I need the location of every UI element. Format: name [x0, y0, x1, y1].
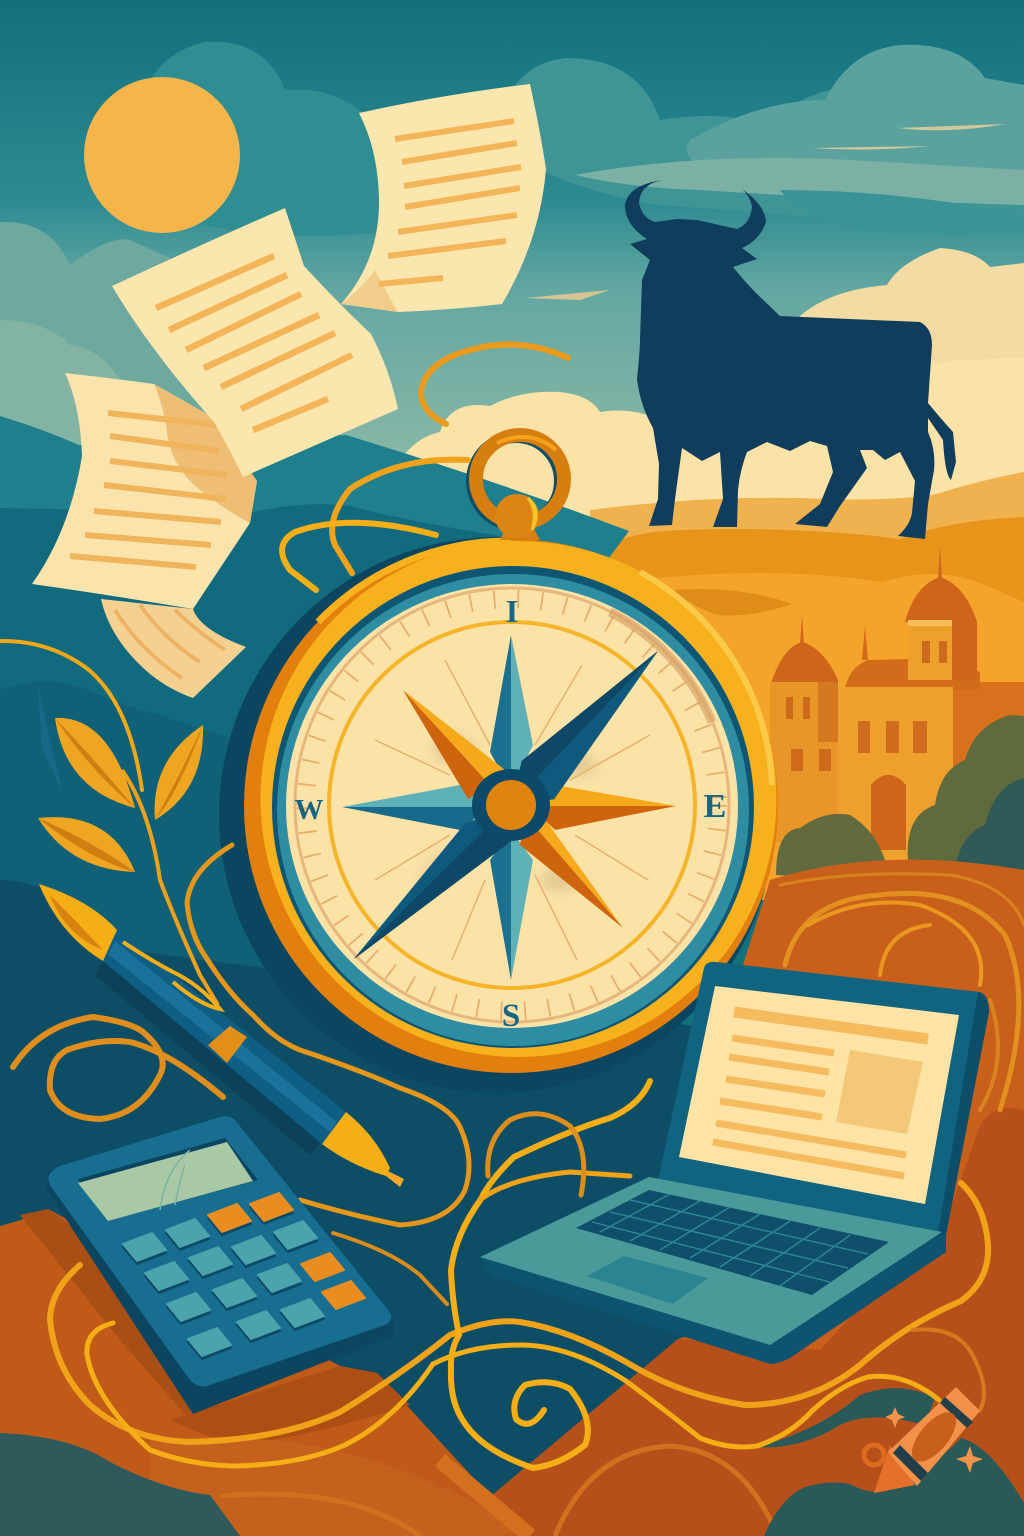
ticks: [295, 588, 729, 1022]
sun: [84, 77, 240, 233]
swirling ribbons upper: [282, 345, 568, 590]
right tower: [905, 546, 977, 680]
teal hills left: [0, 416, 629, 1000]
second wave: [87, 1323, 939, 1466]
swirling ribbons lower: [50, 1081, 988, 1468]
rust ground right: [490, 860, 1024, 1536]
laptop keyboard: [576, 1190, 889, 1295]
outer case: [244, 539, 778, 1073]
compass letters: [294, 593, 726, 1034]
scattered papers: [32, 84, 546, 698]
laptop screen: [679, 986, 959, 1204]
swirling ribbons left: [0, 641, 469, 1304]
north point: [490, 635, 533, 790]
dark foreground: [0, 880, 800, 1536]
center building: [838, 626, 980, 857]
leaf 3: [38, 817, 135, 872]
south point: [490, 830, 533, 980]
northwest point: [403, 690, 505, 799]
crayon: [864, 1387, 983, 1493]
distant hills right: [590, 472, 1024, 620]
rust arcs bottom center: [220, 1446, 775, 1536]
crayon tip: [874, 1445, 915, 1493]
left tower: [770, 615, 838, 842]
compass shadow: [219, 537, 775, 1093]
paper left, curled tail: [101, 599, 246, 698]
thin rays: [375, 660, 650, 960]
pen: [39, 884, 404, 1187]
crayon loop: [913, 1329, 984, 1410]
swirling ribbons right: [780, 874, 1024, 1110]
compass letters: I: [506, 593, 518, 629]
laptop: [480, 962, 989, 1364]
pen band: [208, 1026, 247, 1063]
southeast point: [520, 815, 623, 928]
bushes right: [776, 715, 1024, 880]
bottom left blob: [0, 1433, 240, 1536]
laptop deck: [480, 1177, 942, 1345]
west point: [342, 785, 490, 830]
leaf 1: [55, 718, 135, 808]
teal wave and bottom right blob: [757, 1388, 1024, 1536]
compass letters: S: [502, 998, 520, 1034]
calculator base: [47, 1120, 393, 1414]
hub: [472, 769, 550, 841]
calculator body: [48, 1116, 391, 1387]
calculator orange keys: [208, 1193, 365, 1309]
crayon body: [888, 1387, 980, 1486]
vine and spiral: [451, 1081, 650, 1468]
blue ring: [272, 566, 754, 1048]
inner ring: [329, 622, 695, 988]
calculator teal keys: [123, 1219, 324, 1356]
compass: [219, 435, 778, 1093]
star shadows: [416, 738, 597, 890]
main wave: [50, 1183, 988, 1442]
clouds: upper sky: [110, 42, 1024, 300]
sparkles: [885, 1407, 983, 1473]
compass letters: E: [704, 788, 726, 825]
clouds: left sky: [0, 222, 330, 440]
vine arc: [488, 1114, 584, 1195]
paper top right: [341, 84, 546, 312]
compass ring and crown: [472, 435, 564, 540]
calculator: [47, 1116, 393, 1414]
calculator key shadows: [123, 1196, 324, 1359]
pen shadow: [95, 961, 322, 1155]
hill under the bull: [590, 517, 1024, 700]
laptop trackpad: [587, 1256, 708, 1304]
rust ground left: [0, 1209, 520, 1536]
leaf 2: [155, 725, 203, 820]
laptop lid: [658, 962, 989, 1235]
sky background: [0, 0, 1024, 520]
pen tip: [322, 1112, 404, 1187]
right wing: [950, 682, 1024, 822]
bull silhouette: [625, 180, 956, 539]
pen barrel: [103, 930, 346, 1144]
east point: [530, 785, 676, 830]
ribbon over pen: [123, 942, 220, 1009]
calculator screen: [78, 1138, 258, 1221]
pen nib: [39, 884, 117, 961]
laptop base: [480, 1230, 946, 1364]
compass star: [342, 635, 676, 980]
long needle: [355, 652, 657, 958]
crayon loop end: [864, 1445, 884, 1465]
vine branch: [481, 1172, 630, 1199]
town: palace buildings: [770, 546, 1024, 857]
dial face: [286, 584, 738, 1028]
paper center: [112, 208, 398, 477]
compass letters: W: [294, 794, 324, 826]
cream clouds: [404, 248, 1024, 540]
leafy branch: [38, 685, 218, 1005]
orange field: [640, 573, 1024, 900]
paper left: [32, 373, 257, 609]
